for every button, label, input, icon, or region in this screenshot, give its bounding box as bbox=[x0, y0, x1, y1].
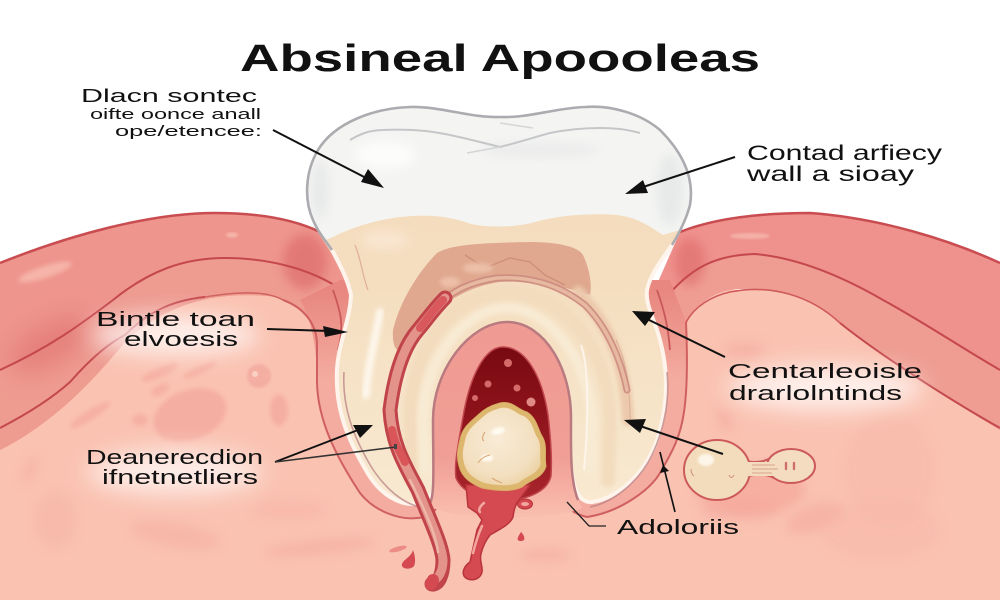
label: middle right bbox=[728, 361, 922, 405]
label: bottom: Adoloriis bbox=[617, 517, 739, 539]
blood drip bbox=[389, 485, 532, 580]
label: middle left: elvoesis bbox=[124, 329, 238, 351]
title: Absineal Apoooleas bbox=[240, 38, 760, 80]
side cyst bbox=[684, 440, 815, 514]
left gum fold bbox=[0, 213, 360, 450]
label glows bbox=[87, 315, 923, 494]
label: top left bbox=[81, 86, 262, 140]
label: top left: ope/etencee: bbox=[115, 123, 262, 140]
arrow: top right bbox=[625, 157, 735, 194]
label: lower left: ifnetnetliers bbox=[102, 467, 258, 489]
label: top right: Contad arfiecy bbox=[747, 142, 943, 165]
label: top right bbox=[745, 142, 943, 186]
gum texture spots bbox=[67, 359, 288, 451]
tooth bbox=[306, 105, 692, 508]
pale lower gum bbox=[0, 290, 1000, 600]
blood vessel bbox=[390, 278, 627, 584]
root highlights bbox=[366, 312, 380, 395]
right gum fold bbox=[650, 213, 1000, 430]
arrow: lower right root bbox=[624, 419, 723, 454]
label: lower left: Deanerecdion bbox=[86, 447, 263, 469]
cavity spots bbox=[472, 359, 536, 406]
arrows: lower left pair bbox=[275, 425, 397, 462]
arrow: top left bbox=[273, 130, 384, 188]
arrow: upper right root bbox=[632, 311, 725, 357]
abscess mass bbox=[457, 402, 546, 491]
cream ring around the chamber bbox=[404, 369, 616, 487]
enamel crown bbox=[308, 108, 690, 240]
tan band on the right bbox=[578, 292, 628, 420]
label: middle right: Centarleoisle bbox=[728, 361, 922, 383]
dentin and root body bbox=[308, 108, 690, 502]
tooth outlines bbox=[307, 107, 500, 250]
dark pulp cavity bbox=[455, 347, 551, 500]
vessel main bbox=[390, 298, 445, 584]
gum tissue bbox=[0, 213, 1000, 600]
soft lower gum shading bbox=[20, 342, 940, 561]
arrow: to root membrane bbox=[660, 452, 675, 512]
pulp tissue blob bbox=[393, 242, 591, 358]
label: middle right: drarlolntinds bbox=[729, 383, 902, 405]
label: middle left: Bintle toan bbox=[96, 309, 255, 331]
upper dentin detail bbox=[355, 245, 368, 290]
crown shading bbox=[658, 158, 682, 222]
leader: bottom label bbox=[567, 502, 606, 526]
vessel upper arc bbox=[438, 278, 627, 390]
label: top left: Dlacn sontec bbox=[81, 86, 257, 106]
pink pulp chamber wall bbox=[428, 322, 582, 517]
chamber outline bbox=[430, 322, 578, 503]
socket around tooth root bbox=[283, 280, 687, 518]
label: lower left bbox=[86, 447, 263, 489]
arrow: middle left bbox=[267, 326, 348, 337]
label: top right: wall a sioay bbox=[745, 163, 915, 186]
label: middle left bbox=[96, 309, 255, 351]
small gum nodule bbox=[247, 364, 271, 388]
label: top left: oifte oonce anall bbox=[90, 106, 261, 123]
